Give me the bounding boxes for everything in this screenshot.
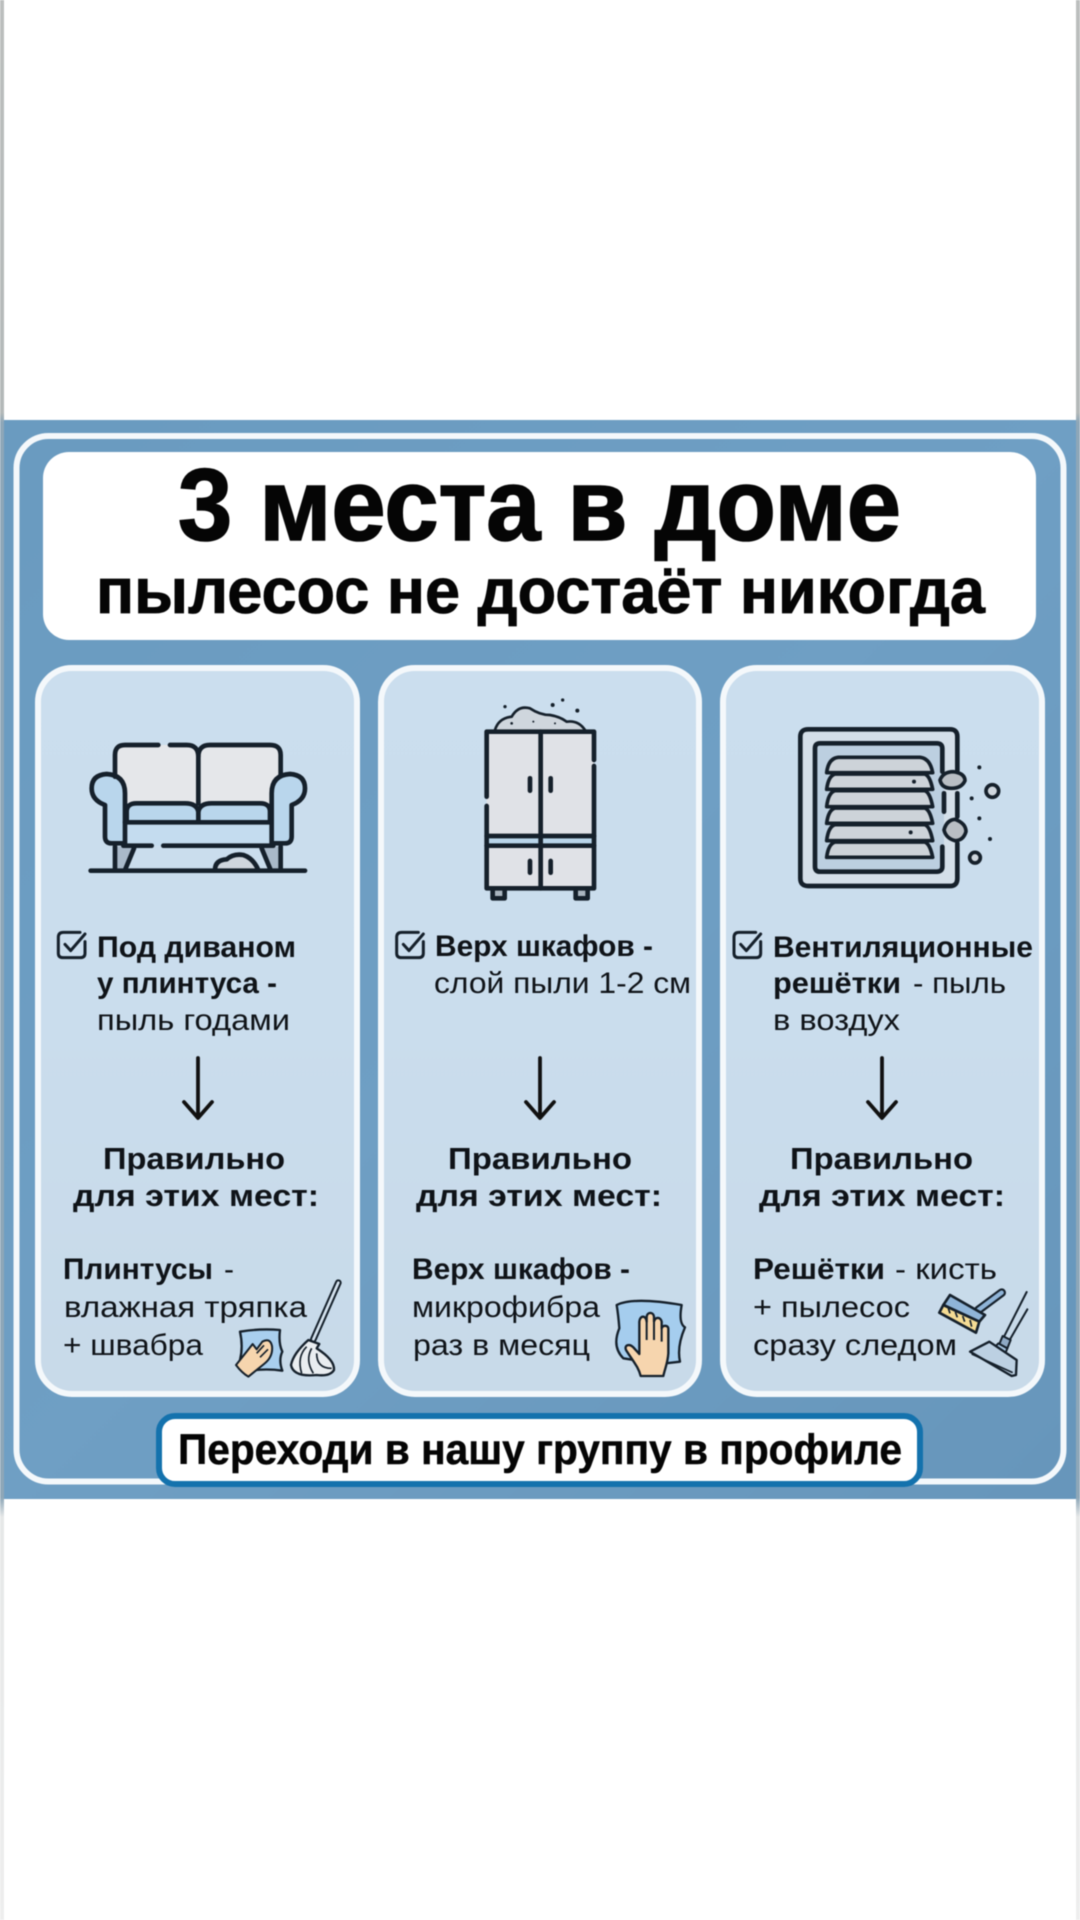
icon: checkbox <box>397 932 423 958</box>
panel: under the sofa <box>38 668 357 1394</box>
solution text: раз в месяц <box>413 1329 590 1362</box>
correct heading: Правильно <box>790 1141 973 1176</box>
problem text <box>773 931 1033 1037</box>
problem text: пыль годами <box>97 1004 290 1037</box>
icon: vacuum nozzle <box>970 1292 1027 1376</box>
problem text <box>97 931 296 1037</box>
panel: ventilation grilles <box>723 668 1042 1394</box>
call to action: Переходи в нашу группу в профиле <box>178 1426 902 1474</box>
problem text: в воздух <box>773 1004 900 1037</box>
icon: sofa with dust <box>91 745 305 871</box>
problem text: решётки <box>773 967 901 1000</box>
arrow <box>868 1058 896 1118</box>
title panel <box>43 448 1036 640</box>
icon: brush <box>939 1293 1002 1333</box>
icon: hand with microfiber cloth <box>616 1301 685 1376</box>
title: 3 места в доме <box>178 448 901 562</box>
solution text: + пылесос <box>753 1291 910 1324</box>
panel: top of wardrobes <box>381 668 699 1394</box>
problem text <box>434 930 691 1000</box>
solution text: Плинтусы <box>63 1253 213 1286</box>
solution text: влажная тряпка <box>64 1291 307 1324</box>
problem text: - пыль <box>913 967 1006 1000</box>
solution text <box>63 1253 307 1362</box>
arrow <box>184 1058 212 1118</box>
icon: wardrobe with dust <box>487 698 594 898</box>
problem text: у плинтуса - <box>97 967 277 1000</box>
correct heading: для этих мест: <box>759 1178 1005 1213</box>
problem text: Вентиляционные <box>773 931 1033 964</box>
white frame <box>16 436 1064 1482</box>
arrow <box>526 1058 554 1118</box>
call to action <box>159 1416 920 1484</box>
correct heading: для этих мест: <box>416 1178 662 1213</box>
problem text: слой пыли 1-2 см <box>434 967 691 1000</box>
icon: mop <box>291 1283 338 1375</box>
solution text: Верх шкафов - <box>412 1253 630 1286</box>
solution text <box>753 1253 997 1362</box>
icon: hand with cloth <box>236 1329 282 1377</box>
correct heading <box>73 1141 319 1213</box>
problem text: Верх шкафов - <box>435 930 653 963</box>
correct heading: Правильно <box>448 1141 632 1176</box>
icon: vent grille with dust <box>799 728 999 887</box>
solution text: + швабра <box>63 1329 203 1362</box>
correct heading <box>759 1141 1005 1213</box>
solution text <box>412 1253 630 1362</box>
icon: checkbox <box>734 932 761 958</box>
infographic blue background <box>4 420 1076 1499</box>
solution text: сразу следом <box>753 1329 957 1362</box>
solution text: Решётки <box>753 1253 885 1286</box>
solution text: - кисть <box>895 1253 997 1286</box>
icon: checkbox <box>58 932 85 958</box>
solution text: - <box>224 1253 234 1286</box>
solution text: микрофибра <box>412 1291 600 1324</box>
subtitle: пылесос не достаёт никогда <box>96 555 985 627</box>
correct heading: для этих мест: <box>73 1178 319 1213</box>
correct heading <box>416 1141 662 1213</box>
correct heading: Правильно <box>103 1141 285 1176</box>
problem text: Под диваном <box>97 931 296 964</box>
